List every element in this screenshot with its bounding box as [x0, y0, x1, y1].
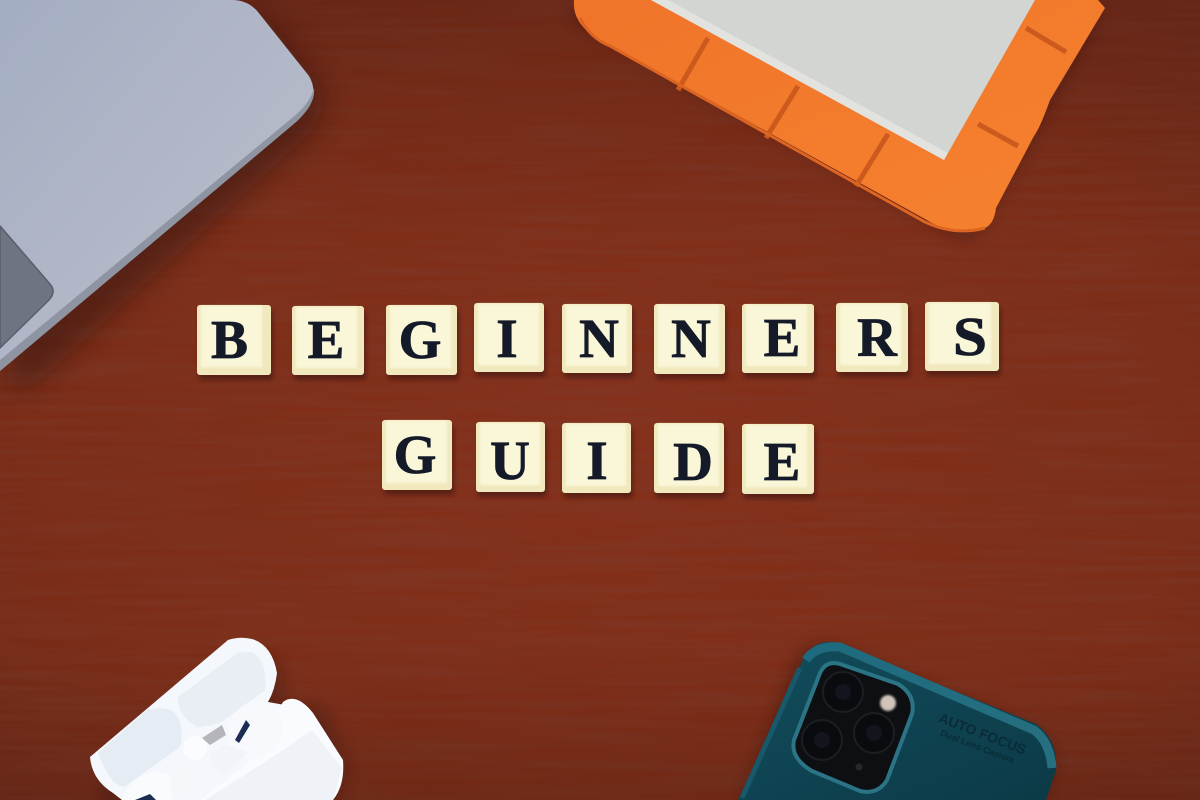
- tile E: E: [308, 309, 344, 370]
- tile E: E: [764, 431, 800, 492]
- tile D: [654, 423, 726, 498]
- tile N: N: [579, 308, 619, 369]
- tile G: [386, 305, 459, 380]
- tile E: [742, 424, 816, 499]
- earbud right: [183, 691, 293, 775]
- tile E: E: [764, 307, 800, 368]
- case lower body: [200, 699, 343, 800]
- tile I: I: [496, 308, 518, 369]
- tile D: D: [673, 431, 713, 492]
- case lid: [90, 638, 285, 800]
- hinge gap: [202, 725, 226, 745]
- tile G: [382, 420, 454, 495]
- tile R: [836, 303, 910, 377]
- tile B: [197, 305, 273, 380]
- tile N: [562, 304, 634, 378]
- phone: [738, 642, 1056, 800]
- phone case text: AUTO FOCUS: [937, 709, 1028, 757]
- tile E: [292, 306, 366, 380]
- tile I: I: [586, 430, 608, 491]
- tile R: R: [857, 307, 898, 368]
- tile G: G: [399, 309, 441, 370]
- camera module: [793, 663, 913, 792]
- tile I: [474, 303, 546, 377]
- phone case text: Dual Lens Camera: [939, 728, 1017, 766]
- orange rugged drive: [571, 0, 1105, 238]
- tile U: U: [490, 430, 530, 491]
- tile I: [562, 423, 633, 498]
- tile B: B: [211, 309, 248, 370]
- laptop trackpad: [0, 226, 53, 348]
- laptop: [0, 0, 322, 390]
- tile S: [925, 302, 1001, 376]
- earbuds case: [90, 638, 349, 800]
- tile E: [742, 304, 816, 378]
- tiles: BEGINNERS: [197, 302, 1001, 380]
- tile U: [476, 422, 547, 497]
- earbud left: [122, 766, 204, 800]
- tiles: GUIDE: [382, 420, 816, 499]
- tile S: S: [953, 306, 987, 367]
- tile N: [654, 304, 727, 379]
- tile G: G: [394, 424, 436, 485]
- tile N: N: [671, 308, 711, 369]
